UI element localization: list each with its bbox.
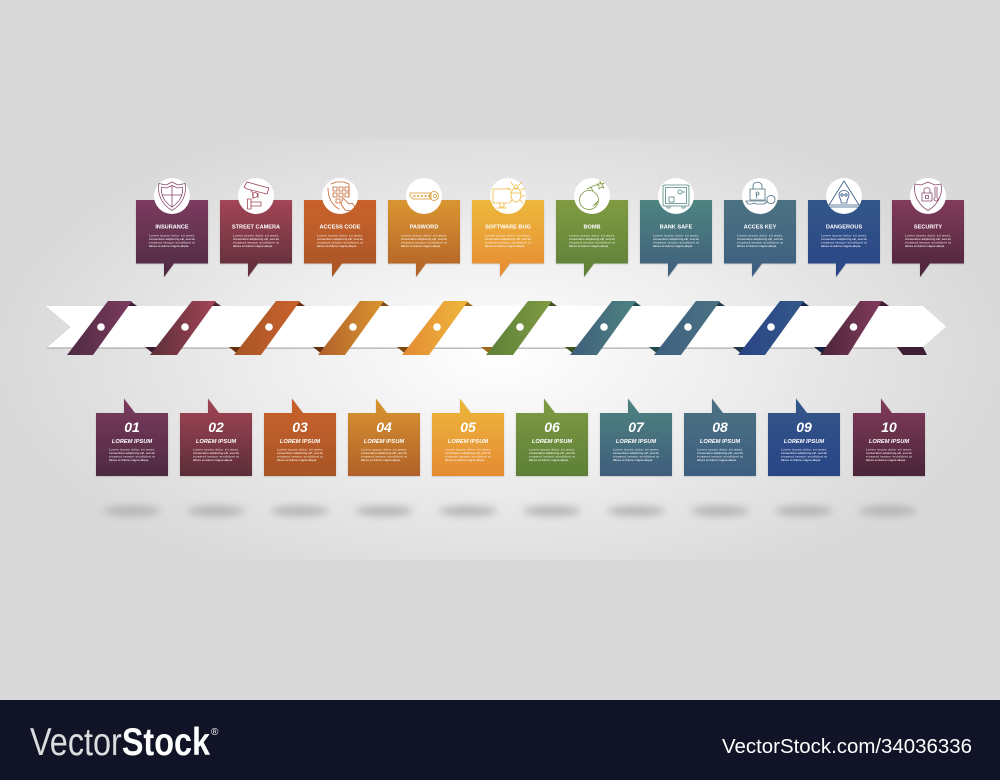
card: bank safe: Lorem ipsum dolor sit amet, bbox=[653, 233, 699, 237]
card 05 bbox=[432, 398, 504, 476]
card 02: labore et dolore magna aliqua. bbox=[193, 458, 233, 462]
card: street camera: consectetur adipiscing elit, sed do bbox=[233, 237, 279, 241]
card: insurance bbox=[136, 178, 208, 277]
card: password: Lorem ipsum dolor sit amet, bbox=[401, 233, 447, 237]
card: access code: consectetur adipiscing elit, sed do bbox=[317, 237, 363, 241]
icon: access code bbox=[328, 182, 355, 211]
card 02 bbox=[180, 398, 252, 476]
card 09: 09 bbox=[796, 419, 812, 435]
card 03 bbox=[264, 398, 336, 476]
card 02: eiusmod tempor incididunt ut bbox=[193, 454, 239, 458]
card: bomb: labore et dolore magna aliqua. bbox=[569, 244, 609, 248]
card: security bbox=[892, 178, 964, 277]
arrow band bbox=[45, 306, 946, 349]
card 06: LOREM IPSUM bbox=[532, 439, 572, 445]
card: security: consectetur adipiscing elit, sed do bbox=[905, 237, 951, 241]
card 07: 07 bbox=[628, 419, 645, 435]
card 09: LOREM IPSUM bbox=[784, 439, 824, 445]
card 04 bbox=[348, 398, 420, 476]
icon: shield bbox=[159, 182, 185, 210]
card 07: Lorem ipsum dolor sit amet, bbox=[613, 448, 659, 452]
card: security: labore et dolore magna aliqua. bbox=[905, 244, 945, 248]
card 05: Lorem ipsum dolor sit amet, bbox=[445, 448, 491, 452]
card: bomb: consectetur adipiscing elit, sed do bbox=[569, 237, 615, 241]
card: insurance: eiusmod tempor incididunt ut bbox=[149, 240, 195, 244]
footer bar bbox=[0, 700, 1000, 780]
card: bomb bbox=[556, 178, 628, 277]
icon: access key bbox=[746, 182, 775, 204]
card: street camera: STREET CAMERA bbox=[232, 224, 280, 230]
card 02: Lorem ipsum dolor sit amet, bbox=[193, 448, 239, 452]
registered mark: ® bbox=[211, 727, 219, 738]
card: dangerous: Lorem ipsum dolor sit amet, bbox=[821, 233, 867, 237]
card: bank safe: consectetur adipiscing elit, sed do bbox=[653, 237, 699, 241]
card 02: LOREM IPSUM bbox=[196, 439, 236, 445]
card: insurance: Lorem ipsum dolor sit amet, bbox=[149, 233, 195, 237]
card 10: Lorem ipsum dolor sit amet, bbox=[866, 448, 912, 452]
icon: skull warning bbox=[829, 181, 859, 207]
card 10: consectetur adipiscing elit, sed do bbox=[866, 451, 912, 455]
card: password bbox=[388, 178, 460, 277]
card 04: 04 bbox=[376, 419, 392, 435]
card 04: Lorem ipsum dolor sit amet, bbox=[361, 448, 407, 452]
card: password: PASWORD bbox=[410, 224, 438, 230]
card: dangerous: DANGEROUS bbox=[826, 224, 862, 230]
card 05: LOREM IPSUM bbox=[448, 439, 488, 445]
card 09: labore et dolore magna aliqua. bbox=[781, 458, 821, 462]
card: street camera: Lorem ipsum dolor sit amet, bbox=[233, 233, 279, 237]
panel: top cards bbox=[136, 178, 964, 277]
card 03: consectetur adipiscing elit, sed do bbox=[277, 451, 323, 455]
icon: bank safe bbox=[663, 185, 689, 208]
card: access code: Lorem ipsum dolor sit amet, bbox=[317, 233, 363, 237]
step marker 9 bbox=[733, 301, 809, 355]
footer url: VectorStock.com/34036336 bbox=[722, 736, 972, 758]
card: insurance: consectetur adipiscing elit, sed do bbox=[149, 237, 195, 241]
card: access code: labore et dolore magna aliqua. bbox=[317, 244, 357, 248]
card: dangerous: labore et dolore magna aliqua. bbox=[821, 244, 861, 248]
card 10: 10 bbox=[881, 419, 897, 435]
card: street camera: eiusmod tempor incididunt ut bbox=[233, 240, 279, 244]
step marker 5 bbox=[397, 301, 473, 355]
card 10 bbox=[853, 398, 925, 476]
arrow ribbon timeline bbox=[45, 301, 946, 355]
card 04: consectetur adipiscing elit, sed do bbox=[361, 451, 407, 455]
card: insurance: labore et dolore magna aliqua. bbox=[149, 244, 189, 248]
icon: bomb bbox=[580, 181, 604, 210]
card 07: LOREM IPSUM bbox=[616, 439, 656, 445]
step marker 4 bbox=[313, 301, 389, 355]
card: access key: Lorem ipsum dolor sit amet, bbox=[737, 233, 783, 237]
card: access key bbox=[724, 178, 796, 277]
card: password: consectetur adipiscing elit, sed do bbox=[401, 237, 447, 241]
step marker 6 bbox=[481, 301, 557, 355]
card 08: labore et dolore magna aliqua. bbox=[697, 458, 737, 462]
card: dangerous: consectetur adipiscing elit, sed do bbox=[821, 237, 867, 241]
card: software bug: Lorem ipsum dolor sit amet, bbox=[485, 233, 531, 237]
card: access code: eiusmod tempor incididunt ut bbox=[317, 240, 363, 244]
card: bomb: BOMB bbox=[583, 224, 601, 230]
card 09: consectetur adipiscing elit, sed do bbox=[781, 451, 827, 455]
card 08: consectetur adipiscing elit, sed do bbox=[697, 451, 743, 455]
card 04: LOREM IPSUM bbox=[364, 439, 404, 445]
card 01: eiusmod tempor incididunt ut bbox=[109, 454, 155, 458]
card 01: consectetur adipiscing elit, sed do bbox=[109, 451, 155, 455]
card 03: eiusmod tempor incididunt ut bbox=[277, 454, 323, 458]
card 06: eiusmod tempor incididunt ut bbox=[529, 454, 575, 458]
step marker 8 bbox=[649, 301, 725, 355]
card 04: labore et dolore magna aliqua. bbox=[361, 458, 401, 462]
card 07: labore et dolore magna aliqua. bbox=[613, 458, 653, 462]
card 02: consectetur adipiscing elit, sed do bbox=[193, 451, 239, 455]
card 07: consectetur adipiscing elit, sed do bbox=[613, 451, 659, 455]
card: street camera bbox=[220, 178, 292, 277]
card 08 bbox=[684, 398, 756, 476]
card 01: labore et dolore magna aliqua. bbox=[109, 458, 149, 462]
card: access code bbox=[304, 178, 376, 277]
icon: security shield bbox=[915, 182, 941, 210]
card 05: labore et dolore magna aliqua. bbox=[445, 458, 485, 462]
card 08: eiusmod tempor incididunt ut bbox=[697, 454, 743, 458]
card 03: 03 bbox=[292, 419, 308, 435]
card: password: labore et dolore magna aliqua. bbox=[401, 244, 441, 248]
step marker 2 bbox=[145, 301, 221, 355]
footer logo: VectorStock bbox=[30, 721, 210, 764]
card 04: eiusmod tempor incididunt ut bbox=[361, 454, 407, 458]
card: bomb: eiusmod tempor incididunt ut bbox=[569, 240, 615, 244]
card 06 bbox=[516, 398, 588, 476]
card 01: 01 bbox=[124, 419, 140, 435]
card: software bug: consectetur adipiscing elit, sed do bbox=[485, 237, 531, 241]
card 03: labore et dolore magna aliqua. bbox=[277, 458, 317, 462]
panel: bottom cards bbox=[96, 398, 925, 476]
card 02: 02 bbox=[208, 419, 224, 435]
card: software bug: eiusmod tempor incididunt ut bbox=[485, 240, 531, 244]
card: security: eiusmod tempor incididunt ut bbox=[905, 240, 951, 244]
card 03: Lorem ipsum dolor sit amet, bbox=[277, 448, 323, 452]
card: access key: ACCES KEY bbox=[744, 224, 777, 230]
card: security: SECURITY bbox=[914, 224, 942, 230]
card: access key: eiusmod tempor incididunt ut bbox=[737, 240, 783, 244]
card: bank safe: labore et dolore magna aliqua. bbox=[653, 244, 693, 248]
card: software bug: labore et dolore magna aliqua. bbox=[485, 244, 525, 248]
card 07 bbox=[600, 398, 672, 476]
card 01: Lorem ipsum dolor sit amet, bbox=[109, 448, 155, 452]
card 01 bbox=[96, 398, 168, 476]
step marker 10 bbox=[814, 301, 927, 355]
card 05: consectetur adipiscing elit, sed do bbox=[445, 451, 491, 455]
step marker 1 bbox=[67, 301, 137, 355]
card 06: labore et dolore magna aliqua. bbox=[529, 458, 569, 462]
card: security: Lorem ipsum dolor sit amet, bbox=[905, 233, 951, 237]
card 08: Lorem ipsum dolor sit amet, bbox=[697, 448, 743, 452]
card: street camera: labore et dolore magna aliqua. bbox=[233, 244, 273, 248]
card 07: eiusmod tempor incididunt ut bbox=[613, 454, 659, 458]
card 09 bbox=[768, 398, 840, 476]
card shadows bbox=[103, 506, 917, 516]
card 08: 08 bbox=[712, 419, 728, 435]
icon: password key bbox=[410, 192, 438, 200]
icon: street camera bbox=[244, 182, 269, 209]
icon: software bug bbox=[493, 182, 525, 208]
card: bank safe bbox=[640, 178, 712, 277]
step marker 3 bbox=[229, 301, 305, 355]
card: bank safe: BANK SAFE bbox=[660, 224, 693, 230]
card 10: eiusmod tempor incididunt ut bbox=[866, 454, 912, 458]
step marker 7 bbox=[565, 301, 641, 355]
card: bank safe: eiusmod tempor incididunt ut bbox=[653, 240, 699, 244]
card: access code: ACCESS CODE bbox=[319, 224, 361, 230]
card 06: Lorem ipsum dolor sit amet, bbox=[529, 448, 575, 452]
card 10: LOREM IPSUM bbox=[869, 439, 909, 445]
card: dangerous bbox=[808, 178, 880, 277]
card 10: labore et dolore magna aliqua. bbox=[866, 458, 906, 462]
card 05: eiusmod tempor incididunt ut bbox=[445, 454, 491, 458]
card: password: eiusmod tempor incididunt ut bbox=[401, 240, 447, 244]
card: access key: labore et dolore magna aliqua. bbox=[737, 244, 777, 248]
card 09: Lorem ipsum dolor sit amet, bbox=[781, 448, 827, 452]
card: software bug bbox=[472, 178, 544, 277]
card 06: consectetur adipiscing elit, sed do bbox=[529, 451, 575, 455]
card 09: eiusmod tempor incididunt ut bbox=[781, 454, 827, 458]
card: software bug: SOFTWARE BUG bbox=[485, 224, 531, 230]
card: dangerous: eiusmod tempor incididunt ut bbox=[821, 240, 867, 244]
card: bomb: Lorem ipsum dolor sit amet, bbox=[569, 233, 615, 237]
card: access key: consectetur adipiscing elit, sed do bbox=[737, 237, 783, 241]
card 08: LOREM IPSUM bbox=[700, 439, 740, 445]
card 05: 05 bbox=[460, 419, 476, 435]
card: insurance: INSURANCE bbox=[155, 224, 189, 230]
card 03: LOREM IPSUM bbox=[280, 439, 320, 445]
card 01: LOREM IPSUM bbox=[112, 439, 152, 445]
card 06: 06 bbox=[544, 419, 560, 435]
